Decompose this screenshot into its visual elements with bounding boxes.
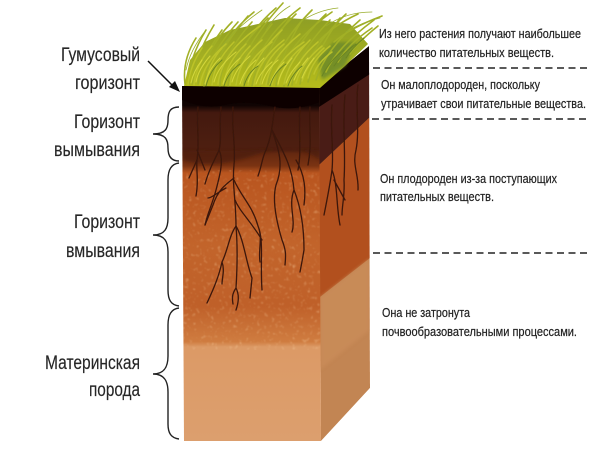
roots xyxy=(189,85,358,310)
label: illuvial horizon xyxy=(66,212,140,262)
brace: parent rock xyxy=(153,308,179,439)
label: humus horizon xyxy=(61,45,140,94)
label: parent rock: Материнская xyxy=(45,353,140,374)
label: illuvial horizon: вмывания xyxy=(66,241,140,262)
label: illuvial horizon: Горизонт xyxy=(74,212,140,233)
label: eluvial horizon xyxy=(54,112,140,161)
label: eluvial horizon: вымывания xyxy=(54,140,140,161)
text: parent rock description: Она не затронута xyxy=(382,306,470,320)
grass xyxy=(184,3,382,88)
text: eluvial description xyxy=(381,78,586,111)
label: eluvial horizon: Горизонт xyxy=(74,112,140,133)
text: parent rock description xyxy=(382,306,577,339)
soil block illustration xyxy=(182,3,382,441)
label: humus horizon: горизонт xyxy=(75,73,140,94)
label: parent rock xyxy=(45,353,140,401)
label: parent rock: порода xyxy=(89,380,140,401)
brace: eluvial horizon xyxy=(153,107,179,161)
text: illuvial description xyxy=(380,172,558,204)
text: parent rock description: почвообразовательными процессами. xyxy=(382,325,577,339)
text: humus description: количество питательных веществ. xyxy=(379,46,554,60)
soil block right face xyxy=(319,46,370,441)
soil block front face xyxy=(182,86,322,441)
label: humus horizon: Гумусовый xyxy=(61,45,140,66)
arrow: humus pointer xyxy=(148,61,180,92)
brace: illuvial horizon xyxy=(153,163,179,306)
text: eluvial description: Он малоплодороден, поскольку xyxy=(381,78,541,92)
text: illuvial description: Он плодороден из-за поступающих xyxy=(380,172,558,186)
text: illuvial description: питательных веществ. xyxy=(380,190,494,204)
text: humus description xyxy=(379,27,581,60)
